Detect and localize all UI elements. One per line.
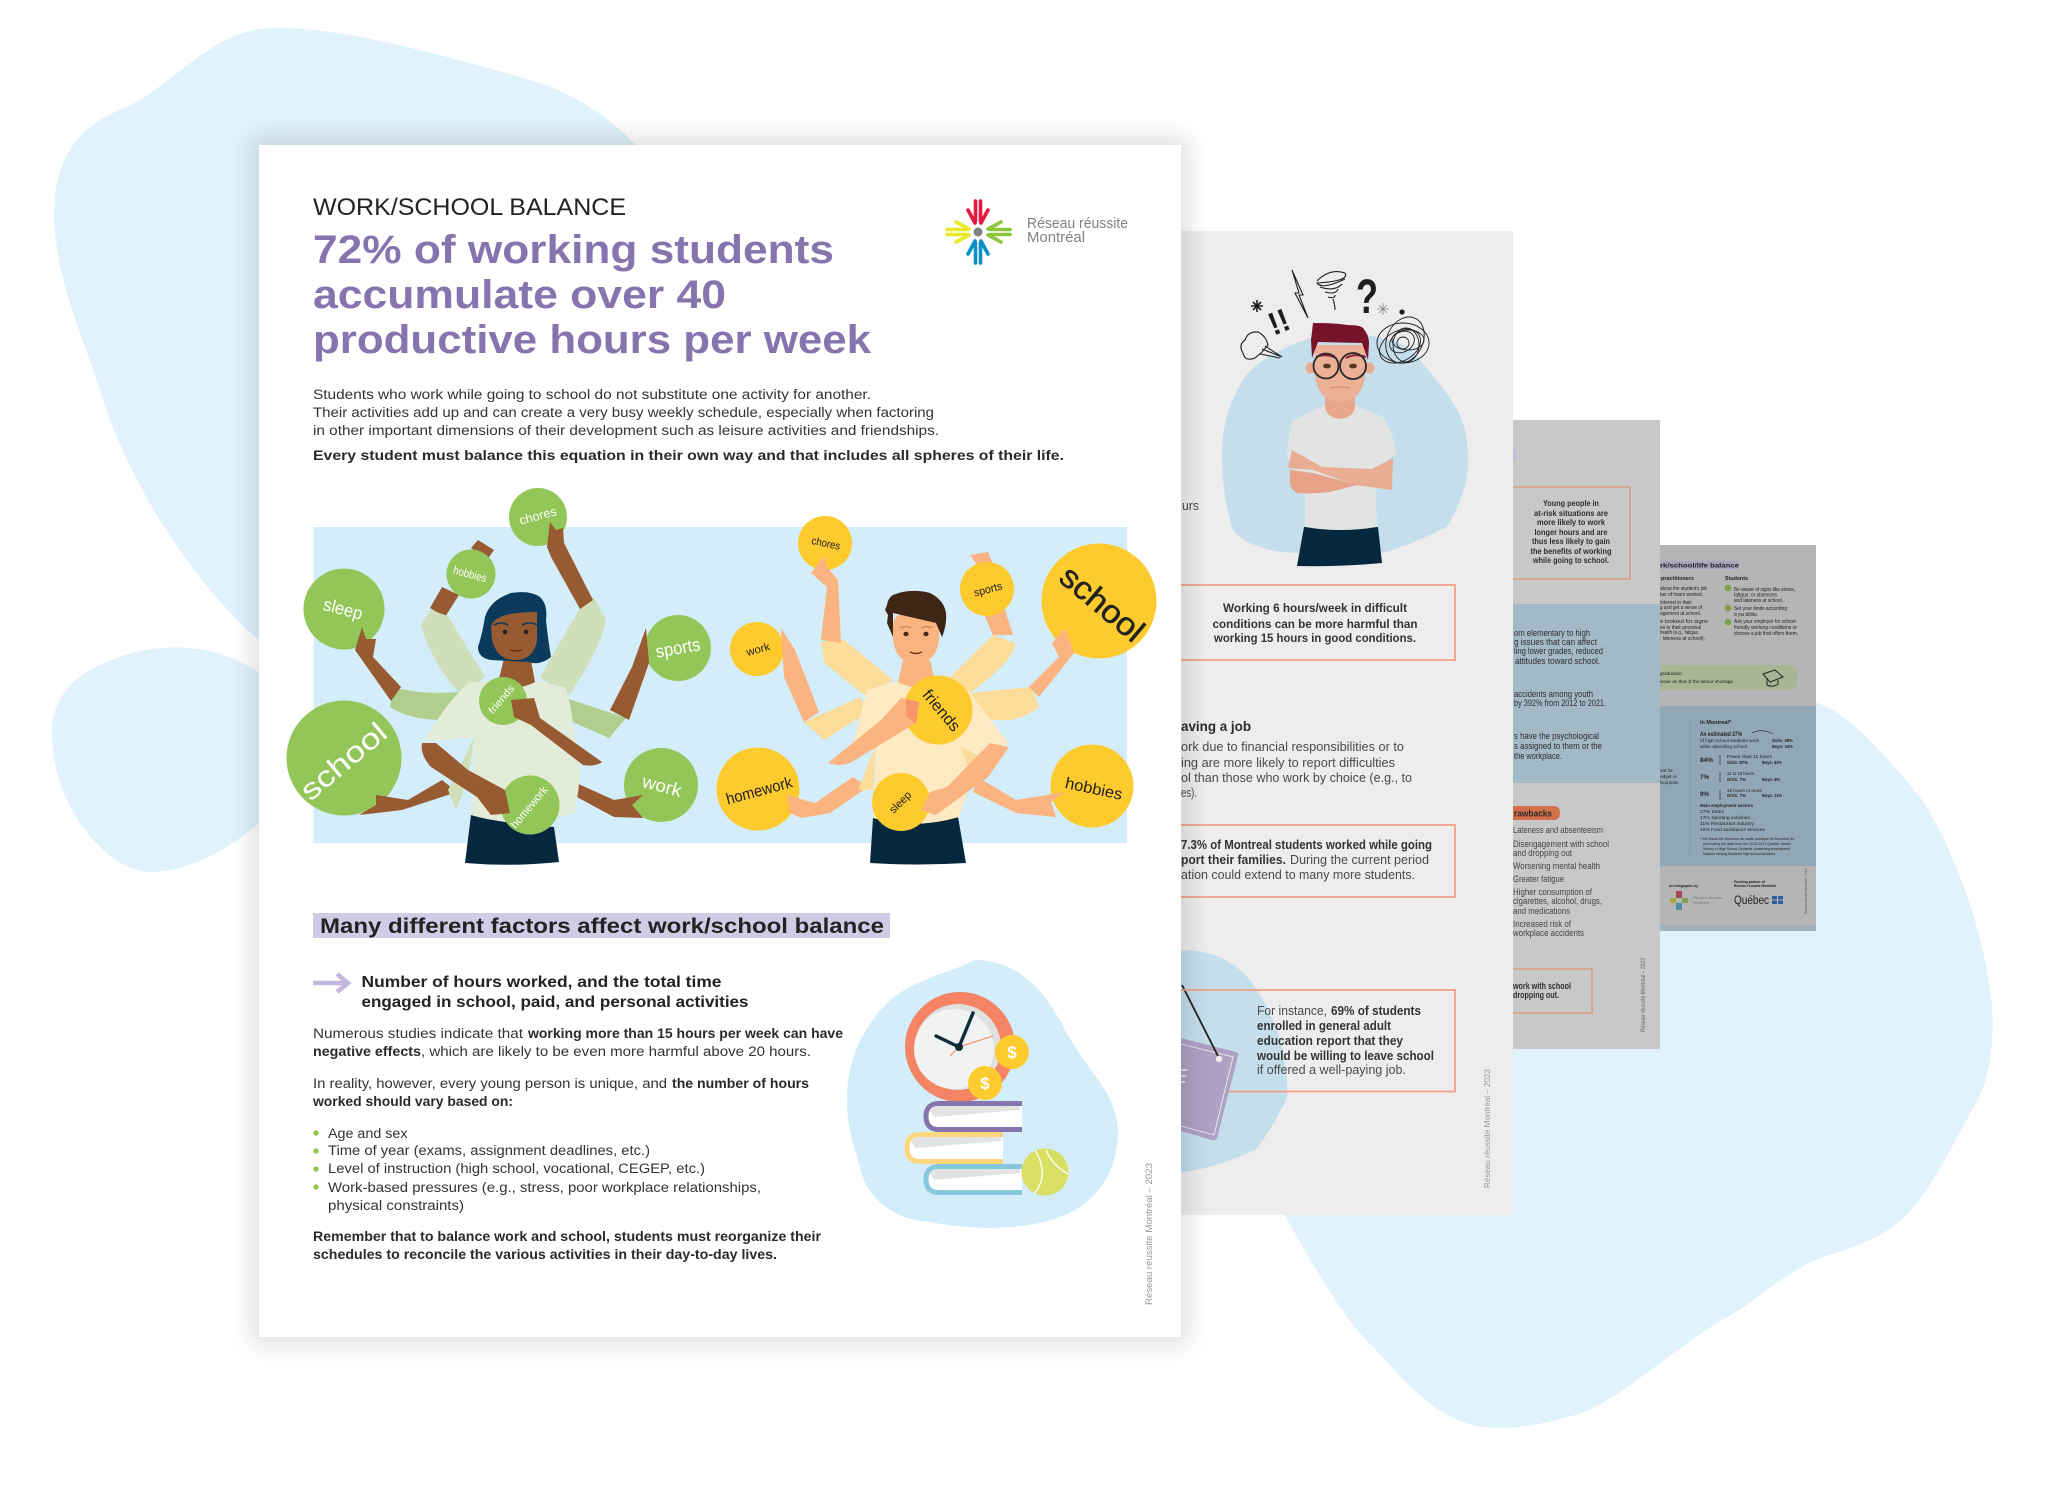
illustration: clock and books <box>847 960 1118 1228</box>
body text: hours: , which are likely to be even more harmful above 20 hours. <box>421 1044 811 1059</box>
page 4 students list: Set your limits according <box>1734 606 1787 612</box>
page 3 callout: while going to school. <box>1532 555 1609 565</box>
page 4 heading: rk/school/life balance <box>1660 562 1739 570</box>
page 4 practitioners list: interest in their <box>1660 600 1692 606</box>
figure: woman with green circles: hobbies <box>452 565 488 585</box>
callout: Montreal students <box>1181 825 1455 897</box>
illustration: clock and books: $ <box>1007 1043 1017 1062</box>
bullet list: Time of year (exams, assignment deadlines, etc.) <box>328 1143 650 1158</box>
figure: man with yellow circles: hobbies <box>1064 775 1124 804</box>
page 4 footer logos: An infographic by <box>1669 883 1699 888</box>
page 4 Montreal statistics: 84% <box>1700 757 1713 764</box>
page 4 Montreal statistics: Survey of High School Students concerning employment <box>1703 847 1791 851</box>
page 4 Montreal statistics: Boys: 81% <box>1762 760 1782 765</box>
page 4 heading <box>1660 561 1739 570</box>
page 3 health text: s assigned to them or the <box>1514 741 1602 751</box>
page 4 footer logos: Québec <box>1734 895 1769 907</box>
page 1 credit: Réseau réussite Montréal – 2023 <box>1144 1163 1154 1305</box>
page 4 Montreal statistics: 7% <box>1700 774 1709 781</box>
page 4 credit: Réseau réussite Montréal – 2023 <box>1803 867 1808 914</box>
page 2 credit: Réseau réussite Montréal – 2023 <box>1483 1068 1492 1188</box>
page 4 Montreal statistics: Girls: 87% <box>1727 760 1748 765</box>
page 4 Montreal statistics: of high school students work <box>1700 738 1760 743</box>
figure: man with yellow circles: chores <box>810 535 842 553</box>
closing statement: Remember that to balance work and school, students must reorganize their <box>313 1229 822 1244</box>
page 4 preview <box>1600 545 1816 931</box>
intro paragraph: Their activities add up and can create a very busy weekly schedule, especially when factoring <box>313 405 934 420</box>
page 4 Montreal statistics: Girls: 38% <box>1772 738 1793 743</box>
page 4 practitioners list: practitioners <box>1661 576 1694 582</box>
logo: Réseau réussite Montréal <box>947 201 1128 263</box>
title: accumulate over 40 <box>313 273 726 317</box>
doodles <box>1241 270 1431 370</box>
figure: woman with green circles: sleep <box>321 594 365 624</box>
body text: hours: Numerous studies indicate that <box>313 1026 523 1041</box>
page 4 footer logos: Funding partner of <box>1734 879 1766 884</box>
page 4 students list: friendly working conditions or <box>1734 625 1797 631</box>
page 4 students list: and lateness at school. <box>1734 598 1783 604</box>
page 4 graduation banner <box>1660 665 1797 690</box>
page 4 footer logos: Réseau réussite Montréal <box>1734 883 1776 888</box>
page 4 students list: Ask your employer for school- <box>1734 619 1797 625</box>
subheading: Number of hours worked, and the total time <box>362 974 722 991</box>
figure: woman with green circles: homework <box>509 784 551 831</box>
page 3 preview <box>1450 420 1660 1049</box>
body text: hours: negative effects <box>313 1044 421 1059</box>
page 4 Montreal statistics: 9% <box>1700 791 1709 798</box>
page 4 Montreal statistics: while attending school <box>1700 744 1747 749</box>
page 4 students list <box>1725 576 1798 637</box>
page 4 practitioners list: e lookout for signs <box>1660 619 1709 625</box>
callout: general adult education <box>1181 990 1455 1092</box>
page 4 Montreal statistics: 10% Food assistance services <box>1700 827 1766 832</box>
eyebrow heading: WORK/SCHOOL BALANCE <box>313 194 626 221</box>
closing statement <box>313 1229 822 1262</box>
page 3 bottom callout: work with school <box>1512 981 1571 991</box>
illustration: clock and books: $ <box>980 1074 990 1093</box>
page 3 drawbacks list: Higher consumption of <box>1513 887 1592 897</box>
page 3 bottom callout: dropping out. <box>1513 990 1559 1000</box>
page 4 Montreal statistics: 11% Restaurant industry <box>1700 821 1755 826</box>
intro paragraph: Every student must balance this equation in their own way and that includes all spheres of their life. <box>313 448 1064 463</box>
page 4 graduation banner: issue as that of the labour shortage <box>1660 679 1734 684</box>
callout: Montreal students: During the current period <box>1290 853 1429 867</box>
page 3 drawbacks list: workplace accidents <box>1512 928 1584 938</box>
callout: Montreal students: ation could extend to many more students. <box>1181 868 1415 882</box>
page 3 health text: ling lower grades, reduced <box>1514 646 1603 656</box>
page 3 drawbacks list: Disengagement with school <box>1513 839 1609 849</box>
page 4 Montreal statistics: * We thank the Direction de santé publique de Montréal for <box>1700 837 1795 841</box>
page 4 practitioners list: ber of hours worked. <box>1660 592 1703 598</box>
intro paragraph: Students who work while going to school do not substitute one activity for another. <box>313 387 871 402</box>
page 3 callout: longer hours and are <box>1534 527 1608 537</box>
illustration: juggling students <box>286 488 1156 865</box>
page 4 Montreal statistics: food pride. <box>1660 780 1679 785</box>
callout: general adult education: enrolled in general adult <box>1257 1019 1392 1033</box>
page 3 callout: at-risk situations are <box>1534 508 1608 518</box>
body text: financial responsibilities <box>1181 740 1412 800</box>
page 4 Montreal statistics: 17% Sporting activities <box>1700 815 1751 820</box>
page 4 footer logos: Réseau réussite <box>1693 895 1723 900</box>
logo: Réseau réussite Montréal: Montréal <box>1027 229 1085 246</box>
page 4 Montreal statistics: Boys: 34% <box>1772 744 1793 749</box>
bullet list: physical constraints) <box>328 1198 464 1213</box>
callout: difficult conditions: conditions can be more harmful than <box>1212 617 1418 631</box>
bullet list: Work-based pressures (e.g., stress, poor workplace relationships, <box>328 1180 761 1195</box>
callout: difficult conditions: working 15 hours in good conditions. <box>1213 631 1416 645</box>
page 2 preview <box>1100 231 1513 1215</box>
page 3 health text: by 392% from 2012 to 2021. <box>1514 698 1606 708</box>
illustration: stressed young man: ? <box>1356 271 1378 324</box>
page 4 Montreal statistics: Boys: 11% <box>1762 793 1782 798</box>
page 1 <box>259 145 1181 1337</box>
page 3 drawbacks list: Lateness and absenteeism <box>1513 825 1603 835</box>
page 4 graduation banner: graduation <box>1660 671 1682 676</box>
title: productive hours per week <box>313 318 872 362</box>
page 4 Montreal statistics: Boys: 8% <box>1762 777 1780 782</box>
page 3 bottom callout <box>1512 969 1592 1013</box>
callout: difficult conditions: Working 6 hours/week in difficult <box>1223 601 1407 615</box>
page 4 Montreal statistics: Girls: 7% <box>1727 777 1746 782</box>
page 3 callout <box>1513 487 1630 579</box>
page 4 Montreal statistics: udget or <box>1660 774 1678 779</box>
page 4 practitioners list <box>1660 576 1709 642</box>
figure: man with yellow circles: homework <box>724 774 795 808</box>
page 4 footer logos: Montréal <box>1693 900 1709 905</box>
page 4 practitioners list: , lateness at school). <box>1660 636 1705 642</box>
section heading: Many different factors affect work/school balance <box>320 914 884 938</box>
page 3 health text: g issues that can affect <box>1514 637 1597 647</box>
page 3 health text: om elementary to high <box>1514 628 1590 638</box>
page 3 callout: more likely to work <box>1537 517 1605 527</box>
figure: woman with green circles: work <box>639 771 685 801</box>
page 3 callout: thus less likely to gain <box>1532 536 1610 546</box>
page 4 Montreal statistics: vat for <box>1660 768 1674 773</box>
body text: financial responsibilities: ing are more likely to report difficulties <box>1181 756 1395 770</box>
page 4 practitioners list: g and get a sense of <box>1660 605 1703 611</box>
page 4 Montreal statistics: In Montreal* <box>1700 720 1731 726</box>
page 3 health text: the workplace. <box>1514 751 1562 761</box>
page 4 practitioners list: es in their personal <box>1660 625 1701 631</box>
title: 72% of working students <box>313 228 834 272</box>
page 4 Montreal statistics: 11 to 15 hours <box>1727 771 1755 776</box>
page 4 students list: to your abilities. <box>1734 612 1758 618</box>
page 4 Montreal statistics: Fewer than 11 hours <box>1727 754 1773 759</box>
illustration: blue blob with job tag <box>1181 950 1287 1172</box>
intro paragraph <box>313 387 1064 463</box>
body text: financial responsibilities: ork due to financial responsibilities or to <box>1181 740 1404 754</box>
bullet list: Age and sex <box>328 1126 408 1141</box>
body text: financial responsibilities: es). <box>1181 786 1197 800</box>
page 4 students list: Students <box>1725 576 1748 582</box>
figure: man with yellow circles: work <box>744 641 772 659</box>
figure: man with yellow circles: friends <box>919 687 963 735</box>
clipped text: urs <box>1182 499 1199 513</box>
bullet list <box>313 1126 761 1213</box>
callout: general adult education: education report that they <box>1257 1034 1403 1048</box>
body text: hours: the number of hours <box>672 1076 809 1091</box>
title <box>313 228 872 362</box>
page 4 Montreal statistics: Girls: 7% <box>1727 793 1746 798</box>
page 3 drawbacks list: and medications <box>1513 906 1570 916</box>
page 4 footer logos <box>1669 879 1783 910</box>
page 4 Montreal statistics: processing the data from the 2016-2017 Québec Health <box>1703 842 1791 846</box>
illustration: stressed young man: !! <box>1263 301 1295 342</box>
figure: woman with green circles: chores <box>518 504 558 528</box>
heading: having a job: aving a job <box>1181 718 1251 734</box>
figure: woman with green circles: sports <box>654 634 702 662</box>
callout: general adult education: if offered a well-paying job. <box>1257 1063 1406 1077</box>
figure: woman with green circles <box>286 488 711 865</box>
figure: man with yellow circles: sleep <box>887 789 914 816</box>
page 3 health text: accidents among youth <box>1514 689 1593 699</box>
page 4 practitioners list: health (e.g., fatigue, <box>1660 630 1699 636</box>
callout: general adult education: For instance, <box>1257 1004 1327 1018</box>
page 3 health text <box>1514 628 1606 761</box>
page 4 Montreal statistics: 27% Sales <box>1700 809 1725 814</box>
figure: man with yellow circles: school <box>1053 558 1152 649</box>
page 3 credit: Réseau réussite Montréal – 2023 <box>1641 957 1647 1032</box>
callout: difficult conditions <box>1181 585 1455 660</box>
body text: financial responsibilities: ol than those who work by choice (e.g., to <box>1181 771 1412 785</box>
page 3 callout: the benefits of working <box>1530 546 1612 556</box>
body text: hours: worked should vary based on: <box>312 1094 513 1109</box>
page 3 drawbacks list: rawbacks <box>1514 808 1552 820</box>
page 1 shadow <box>251 137 1189 1345</box>
figure: man with yellow circles <box>716 516 1156 864</box>
icon: arrow <box>313 974 348 992</box>
page 3 health text: attitudes toward school. <box>1515 656 1600 666</box>
page 4 Montreal statistics: Main employment sectors <box>1700 803 1753 808</box>
page 4 students list: fatigue, or absences <box>1734 592 1777 598</box>
body text: hours: working more than 15 hours per week can have <box>527 1026 843 1041</box>
bullet list: Level of instruction (high school, vocational, CEGEP, etc.) <box>328 1161 705 1176</box>
figure: woman with green circles: friends <box>486 683 517 717</box>
subheading: engaged in school, paid, and personal activities <box>362 994 749 1011</box>
body text: hours <box>312 1026 843 1109</box>
intro paragraph: in other important dimensions of their development such as leisure activities and friendships. <box>313 423 939 438</box>
subheading <box>362 974 749 1011</box>
page 4 Montreal statistics: balance among Montréal high school students. <box>1703 852 1776 856</box>
page 4 students list: choose a job that offers them. <box>1734 631 1798 637</box>
page 3 health text: s have the psychological <box>1514 731 1599 741</box>
closing statement: schedules to reconcile the various activities in their day-to-day lives. <box>313 1247 777 1262</box>
page 3 drawbacks list: cigarettes, alcohol, drugs, <box>1513 896 1602 906</box>
page 3 drawbacks list <box>1512 806 1609 938</box>
page 4 practitioners list: agement at school. <box>1660 611 1701 617</box>
page 4 practitioners list: about the student's job <box>1660 586 1707 592</box>
page 3 drawbacks list: Worsening mental health <box>1513 861 1600 871</box>
figure: man with yellow circles: sports <box>973 580 1004 600</box>
body text: hours: In reality, however, every young person is unique, and <box>313 1076 667 1091</box>
illustration: stressed young man <box>1222 270 1468 566</box>
page 3 callout: Young people in <box>1543 498 1599 508</box>
page 4 Montreal statistics <box>1660 720 1795 856</box>
page 4 Montreal statistics: 16 hours or more <box>1727 788 1762 793</box>
callout: Montreal students: port their families. <box>1181 853 1286 867</box>
page 3 drawbacks list: Greater fatigue <box>1513 874 1564 884</box>
logo: Réseau réussite Montréal: Réseau réussite <box>1027 215 1128 232</box>
page 3 drawbacks list: Increased risk of <box>1513 919 1571 929</box>
figure: woman with green circles: school <box>294 717 394 807</box>
callout: Montreal students: 7.3% of Montreal students worked while going <box>1181 838 1432 852</box>
page 4 students list: Be aware of signs like stress, <box>1734 587 1795 593</box>
page 3 drawbacks list: and dropping out <box>1513 848 1572 858</box>
callout: general adult education: 69% of students <box>1331 1004 1421 1018</box>
page 4 Montreal statistics: An estimated 37% <box>1700 732 1743 738</box>
callout: general adult education: would be willing to leave school <box>1256 1049 1434 1063</box>
